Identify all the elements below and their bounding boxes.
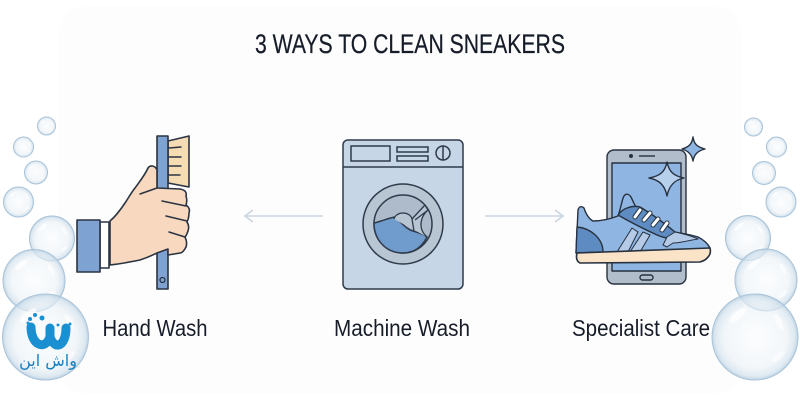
bubbles: left column bbox=[2, 117, 88, 380]
brush bristles bbox=[168, 136, 189, 187]
logo mark bbox=[31, 327, 66, 345]
blue sleeve bbox=[77, 220, 100, 272]
phone screen bbox=[612, 163, 681, 271]
arrow: right bbox=[485, 210, 563, 222]
small sparkle bbox=[682, 137, 705, 161]
logo: Wash Inn bbox=[19, 313, 77, 371]
title: 3 WAYS TO CLEAN SNEAKERS bbox=[255, 29, 565, 59]
icon: phone with sneaker bbox=[576, 137, 710, 284]
hand bbox=[110, 166, 189, 265]
brush handle bbox=[157, 136, 168, 289]
icon: washing machine bbox=[343, 140, 463, 289]
label: Machine Wash: Machine Wash bbox=[334, 315, 470, 341]
machine body bbox=[343, 140, 463, 289]
large sparkle bbox=[649, 162, 684, 196]
white shirt cuff bbox=[100, 222, 109, 268]
phone body bbox=[607, 150, 686, 284]
control panel bbox=[351, 146, 390, 161]
icon: hand holding brush bbox=[77, 136, 189, 289]
label: Hand Wash: Hand Wash bbox=[102, 315, 208, 341]
bubbles: right column bbox=[712, 118, 798, 380]
water bbox=[374, 217, 427, 253]
logo text: واش این bbox=[19, 351, 77, 371]
door bbox=[363, 184, 443, 264]
label: Specialist Care: Specialist Care bbox=[572, 315, 710, 341]
arrow: left bbox=[245, 210, 323, 222]
sneaker bbox=[576, 194, 710, 263]
